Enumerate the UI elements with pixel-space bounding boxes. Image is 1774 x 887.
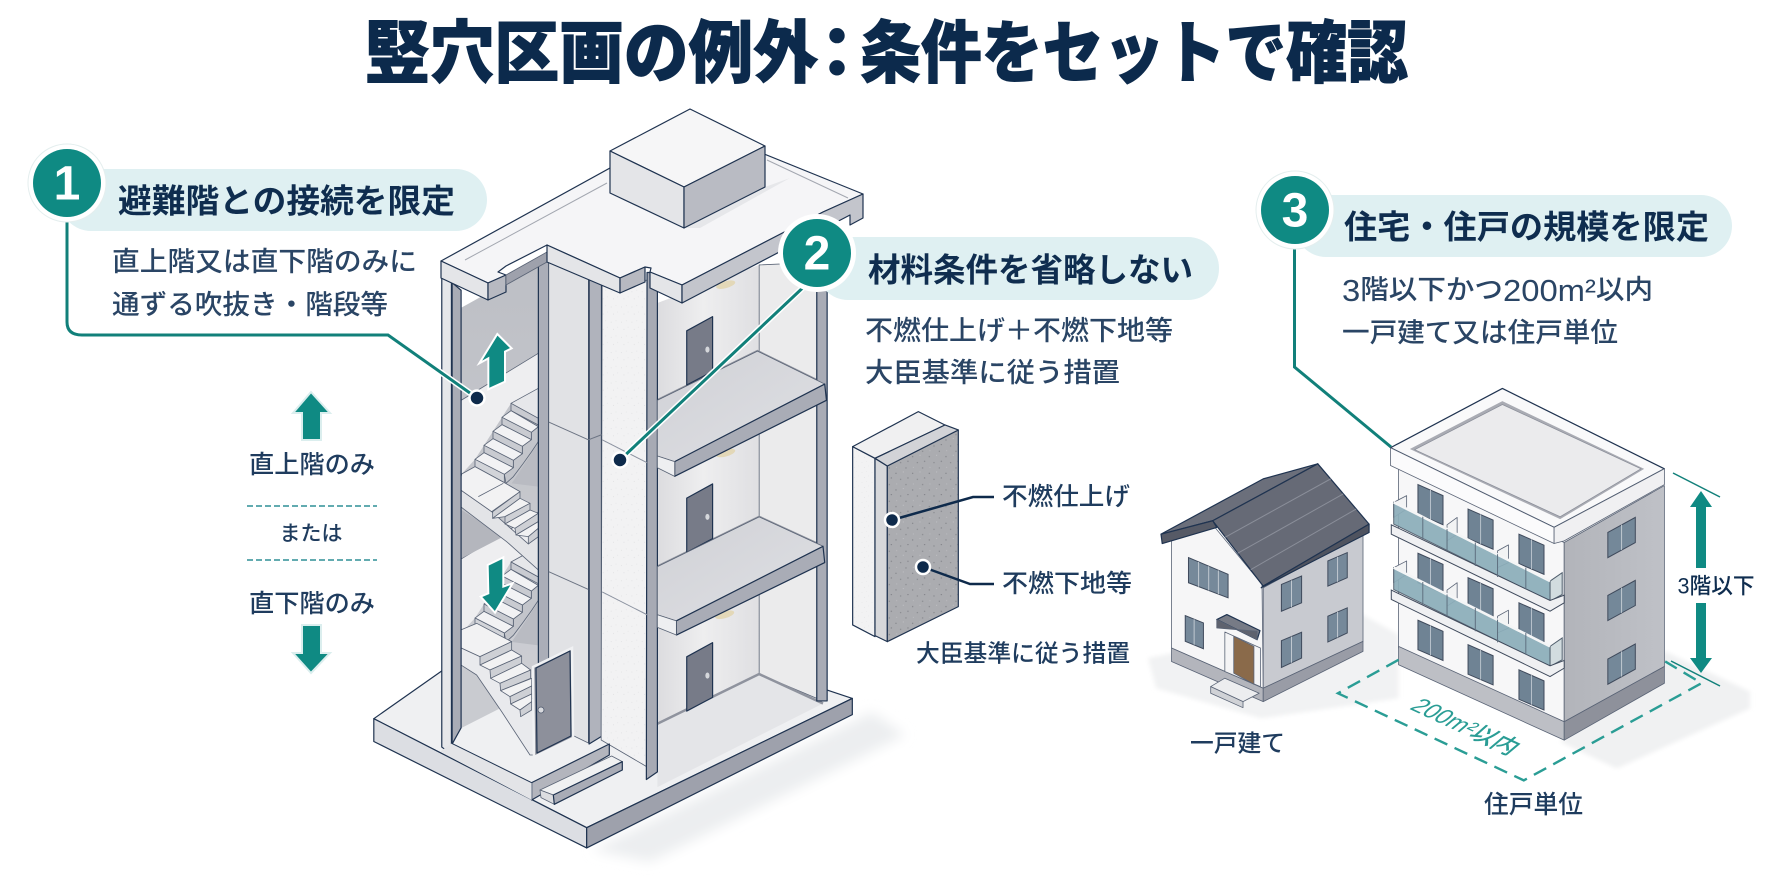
columns, slabs and doors [442, 252, 827, 780]
title: 竪穴区画の例外 [365, 16, 818, 92]
heading: 材料条件を省略しない [868, 252, 1193, 288]
left facade windows [1418, 485, 1544, 710]
label: detached house: 一戸建て [1190, 730, 1285, 758]
heading pill [60, 169, 487, 231]
label: 3階以下 [1678, 574, 1754, 598]
side windows [1608, 517, 1635, 684]
heading pill [817, 237, 1219, 300]
body line 1: 不燃仕上げ＋不燃下地等 [865, 316, 1173, 346]
entrance steps [1211, 678, 1259, 708]
leader line [1294, 245, 1391, 447]
body line 2: 一戸建て又は住戸単位 [1342, 318, 1618, 348]
wall panel diagram [853, 412, 1132, 668]
label: finish: 不燃仕上げ [1002, 483, 1130, 511]
label: upper floor only: 直上階のみ [249, 451, 375, 479]
roof slab [441, 124, 863, 303]
leader line inner [1294, 245, 1391, 447]
body line 2: 大臣基準に従う措置 [865, 358, 1120, 388]
front door and canopy [1217, 615, 1260, 687]
floor area dashed outline [1338, 660, 1702, 780]
number badge [1256, 171, 1334, 249]
label: ministerial standard: 大臣基準に従う措置 [916, 640, 1130, 668]
body line 2: 通ずる吹抜き・階段等 [112, 290, 388, 320]
number badge [778, 214, 856, 292]
anchor dot [612, 452, 628, 468]
title: 条件をセットで確認 [860, 16, 1408, 92]
stair door [533, 648, 573, 757]
ground shadow [1560, 651, 1750, 769]
body line 1: 直上階又は直下階のみに [112, 247, 417, 277]
lower stair flight going up [462, 512, 538, 645]
heading: 避難階との接続を限定 [118, 182, 455, 220]
heading pill [1295, 195, 1732, 257]
finish dot [885, 513, 899, 527]
main building cutaway [374, 109, 905, 862]
lower arrow [1690, 603, 1712, 673]
title [365, 16, 1408, 92]
facades [1399, 467, 1664, 740]
label: dwelling unit: 住戸単位 [1484, 791, 1583, 819]
number badge: 1 [54, 158, 80, 210]
substrate dot [916, 560, 930, 574]
finish pointer [892, 497, 994, 520]
label: lower floor only: 直下階のみ [249, 590, 375, 618]
rooftop penthouse [610, 109, 790, 228]
upper arrow [1690, 491, 1712, 568]
body line 1: 3階以下かつ200m²以内 [1342, 272, 1653, 308]
entrance steps [440, 743, 622, 804]
down arrow on stairs [481, 557, 513, 613]
section 1 callout [28, 144, 487, 406]
section 3 callout [1256, 171, 1732, 447]
direction legend [247, 392, 377, 673]
walls [1172, 525, 1363, 702]
up arrow [293, 392, 330, 440]
height dimension [1671, 473, 1754, 686]
shaft base and lower flight [452, 623, 609, 783]
leader line [620, 281, 810, 460]
windows [1185, 553, 1347, 667]
ground shadow [592, 712, 905, 862]
leader line inner [620, 281, 810, 460]
up arrow on stairs [479, 334, 512, 389]
anchor dot [470, 390, 484, 406]
detached house [1148, 464, 1399, 718]
label: substrate: 不燃下地等 [1002, 570, 1132, 598]
down arrow [293, 625, 330, 673]
label: or: または [280, 522, 342, 546]
number badge: 3 [1282, 184, 1308, 238]
building floor plate and walls [374, 262, 852, 848]
upper stair flight and landing [458, 353, 538, 570]
wall layers [853, 412, 958, 642]
roof [1390, 388, 1664, 544]
leader line inner [67, 222, 477, 398]
roof [1161, 464, 1369, 588]
area label: 200m²以内 [1404, 694, 1526, 760]
heading: 住宅・住戸の規模を限定 [1344, 208, 1709, 246]
balconies [1391, 496, 1564, 677]
substrate pointer [923, 567, 994, 584]
number badge: 2 [804, 228, 830, 280]
apartment building [1338, 388, 1750, 780]
title: ： [803, 16, 871, 92]
ground shadow [1148, 615, 1399, 718]
leader line [67, 222, 477, 398]
section 2 callout [612, 214, 1219, 468]
number badge [28, 144, 106, 222]
